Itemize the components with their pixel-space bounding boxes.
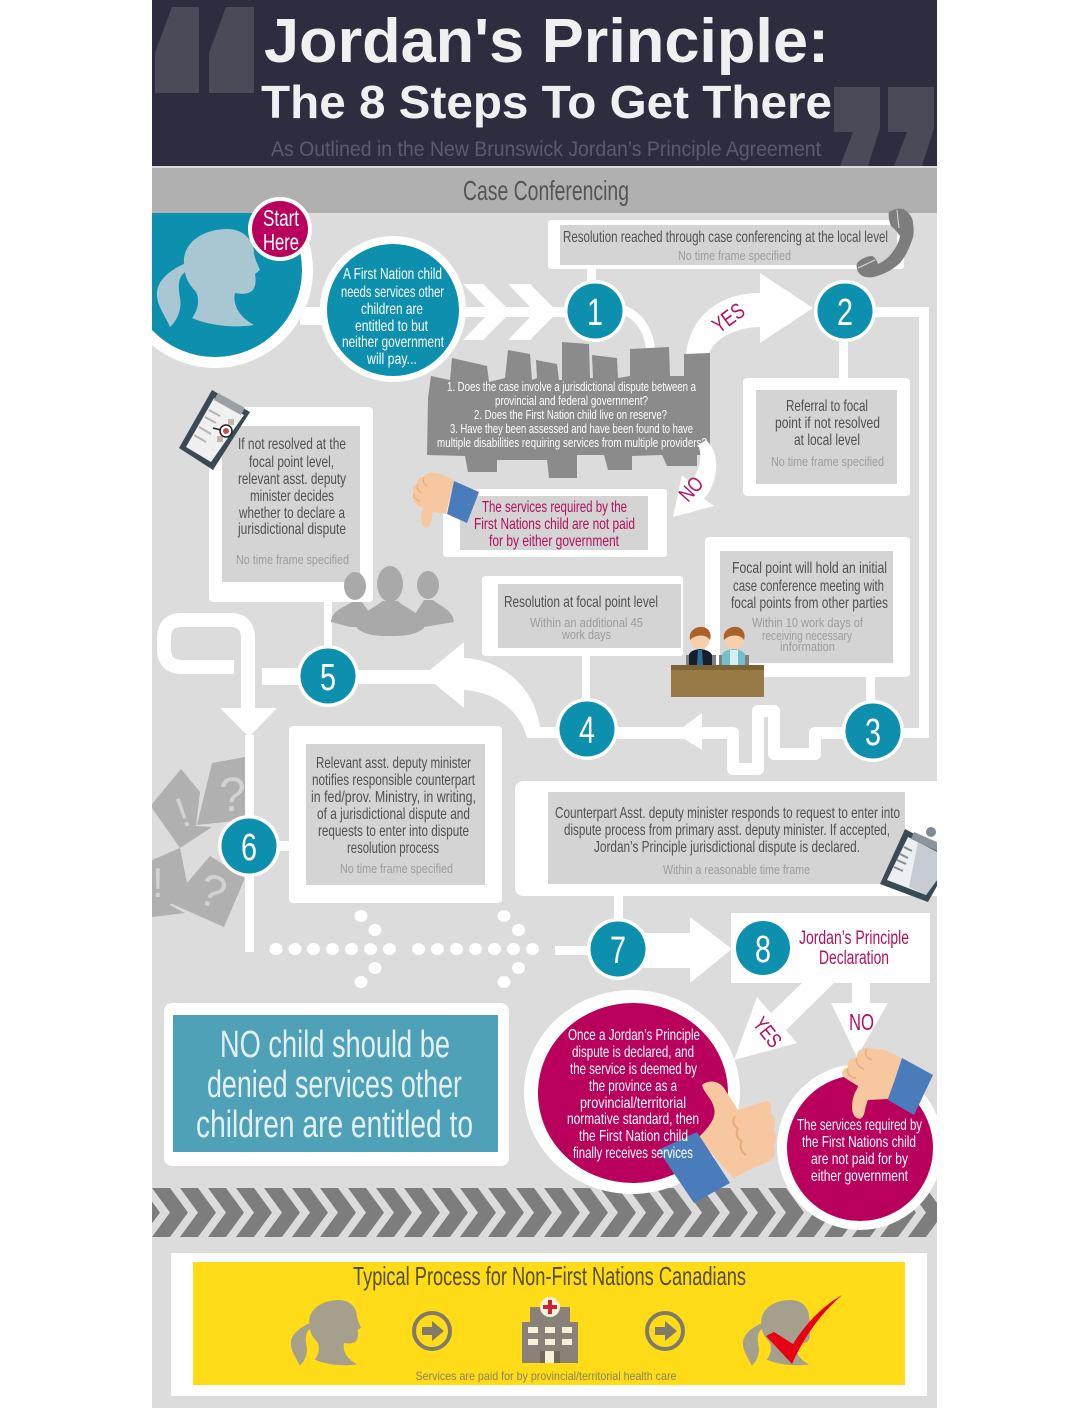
panel: resolution at focal point: work days bbox=[561, 628, 611, 642]
panel: step 8 declaration: Jordan’s Principle bbox=[799, 928, 909, 949]
circle: first nation child: children are bbox=[361, 301, 423, 318]
panel: gray question block bbox=[427, 342, 710, 478]
title: Jordan's Principle: bbox=[264, 7, 829, 76]
panel: gray question block: 1. Does the case involve a jurisdictional dispute between a bbox=[447, 380, 696, 394]
badge: start here: Here bbox=[263, 229, 299, 255]
icon: clipboard with chart bbox=[880, 827, 937, 902]
connector paths bbox=[164, 268, 924, 983]
circle: first nation child: entitled to but bbox=[355, 318, 428, 335]
icon: two officials at desk bbox=[671, 627, 764, 697]
panel: services not paid: for by either government bbox=[489, 533, 619, 550]
panel: services not paid: The services required by the bbox=[482, 499, 627, 516]
callout: no child should be denied: denied services other bbox=[207, 1064, 462, 1106]
panel: relevant asst. deputy minister notifies: resolution process bbox=[347, 840, 439, 857]
circle: services not paid bbox=[777, 1064, 943, 1230]
badge: start here bbox=[248, 197, 312, 261]
icon: question and exclamation tiles: ! bbox=[169, 788, 196, 836]
arrow: yes from step 8: YES bbox=[748, 1013, 786, 1052]
panel: services not paid bbox=[443, 489, 667, 557]
circle: first nation child: needs services other bbox=[341, 284, 444, 301]
circle: service received: provincial/territorial bbox=[580, 1095, 686, 1112]
panel: focal point meeting bbox=[705, 537, 910, 677]
panel: local resolution: No time frame specified bbox=[678, 249, 791, 263]
panel: focal point meeting: Within 10 work days of bbox=[752, 616, 863, 630]
step 1 bbox=[564, 280, 626, 342]
icon: girl silhouette bbox=[157, 229, 260, 327]
panel: counterpart response: Within a reasonable time frame bbox=[663, 863, 810, 877]
panel: relevant asst. deputy minister notifies: No time frame specified bbox=[340, 862, 453, 876]
callout: no child should be denied: children are entitled to bbox=[196, 1104, 473, 1146]
circle: first nation child: A First Nation child bbox=[343, 266, 442, 283]
step 5 bbox=[297, 645, 359, 707]
panel: relevant asst. deputy minister notifies: requests to enter into dispute bbox=[318, 823, 469, 840]
arrow: yes from step 8 bbox=[734, 983, 834, 1060]
step 2 bbox=[814, 280, 876, 342]
arrow: yes to step 2: YES bbox=[707, 298, 749, 338]
circle: services not paid: The services required by bbox=[797, 1117, 922, 1134]
panel: typical process: Typical Process for Non-First Nations Canadians bbox=[353, 1261, 746, 1291]
circle: service received: the First Nation child bbox=[579, 1128, 688, 1145]
panel: focal point meeting: case conference meeting with bbox=[733, 578, 884, 595]
panel: local resolution: Resolution reached through case conferencing at the local level bbox=[563, 229, 888, 246]
panel: step 8 declaration: Declaration bbox=[819, 948, 889, 969]
step 4: 4 bbox=[579, 710, 595, 752]
step 6 bbox=[218, 815, 280, 877]
step 2: 2 bbox=[837, 292, 853, 334]
agreement note: As Outlined in the New Brunswick Jordan’s Principle Agreement bbox=[271, 138, 821, 161]
panel: not resolved at focal point level: If not resolved at the bbox=[238, 436, 346, 453]
chevron band bbox=[124, 1188, 944, 1237]
caption: paid by health care: Services are paid for by provincial/territorial health care bbox=[416, 1369, 677, 1383]
panel: referral to focal point: No time frame specified bbox=[771, 455, 884, 469]
icon: question and exclamation tiles: ? bbox=[219, 769, 246, 822]
panel: focal point meeting: Focal point will hold an initial bbox=[732, 560, 887, 577]
panel: referral to focal point bbox=[743, 378, 910, 496]
callout: no child should be denied: NO child should be bbox=[220, 1024, 450, 1066]
panel: not resolved at focal point level: jurisdictional dispute bbox=[237, 521, 346, 538]
panel: relevant asst. deputy minister notifies: of a jurisdictional dispute and bbox=[317, 806, 470, 823]
icon: thumbs down bbox=[413, 473, 479, 528]
panel: step 8 declaration bbox=[731, 913, 930, 983]
icon: closing quotation marks bbox=[834, 87, 934, 166]
panel: services not paid: First Nations child are not paid bbox=[474, 516, 635, 533]
panel: referral to focal point: point if not resolved bbox=[775, 415, 880, 432]
panel: counterpart response: dispute process from primary asst. deputy minister. If accepted, bbox=[564, 822, 890, 839]
arrow: no to not paid box bbox=[673, 440, 716, 517]
circle: first nation child bbox=[320, 236, 466, 382]
circle: service received: the province as a bbox=[589, 1078, 677, 1095]
section band: case conferencing: Case Conferencing bbox=[463, 175, 629, 206]
step 1: 1 bbox=[587, 292, 603, 334]
panel: not resolved at focal point level: No time frame specified bbox=[236, 553, 349, 567]
panel: relevant asst. deputy minister notifies bbox=[289, 726, 502, 903]
subtitle line: The 8 Steps To Get There bbox=[261, 76, 832, 128]
icon: girl with check bbox=[743, 1295, 842, 1366]
panel: gray question block: 2. Does the First Nation child live on reserve? bbox=[474, 408, 667, 422]
panel: gray question block: 3. Have they been assessed and have been found to have bbox=[450, 422, 693, 436]
icon: hospital bbox=[522, 1297, 578, 1363]
panel: not resolved at focal point level: minister decides bbox=[250, 488, 334, 505]
icon: arrow in circle bbox=[414, 1313, 450, 1349]
panel: relevant asst. deputy minister notifies: Relevant asst. deputy minister bbox=[316, 755, 471, 772]
step 6: 6 bbox=[241, 827, 257, 869]
icon: question and exclamation tiles: ! bbox=[152, 859, 164, 906]
panel: not resolved at focal point level: relevant asst. deputy bbox=[238, 471, 346, 488]
circle: first nation child: neither government bbox=[342, 334, 444, 351]
panel: focal point meeting: focal points from other parties bbox=[731, 595, 888, 612]
step 3 bbox=[842, 700, 904, 762]
icon: thumbs down right bbox=[842, 1048, 933, 1119]
arrow: no from step 8 bbox=[831, 983, 888, 1057]
panel: typical process bbox=[171, 1253, 927, 1396]
panel: resolution at focal point bbox=[482, 576, 683, 656]
panel: focal point meeting: receiving necessary bbox=[762, 629, 853, 643]
panel: resolution at focal point: Resolution at focal point level bbox=[504, 594, 658, 611]
icon: question and exclamation tiles bbox=[152, 757, 246, 927]
section band: case conferencing bbox=[152, 168, 937, 213]
dotted arrows bbox=[270, 910, 539, 988]
panel: not resolved at focal point level: whether to declare a bbox=[238, 505, 345, 522]
circle: service received: normative standard, then bbox=[567, 1111, 699, 1128]
panel: not resolved at focal point level: focal point level, bbox=[249, 454, 334, 471]
panel: gray question block: provincial and federal government? bbox=[495, 394, 648, 408]
step 3: 3 bbox=[865, 712, 881, 754]
panel: resolution at focal point: Within an additional 45 bbox=[530, 616, 643, 630]
step 5: 5 bbox=[320, 657, 336, 699]
icon: question and exclamation tiles: ? bbox=[192, 862, 234, 920]
header banner bbox=[152, 0, 937, 166]
panel: counterpart response: Counterpart Asst. deputy minister responds to request to enter into bbox=[555, 805, 900, 822]
callout: no child should be denied bbox=[164, 1003, 509, 1166]
circle: service received: dispute is declared, and bbox=[572, 1044, 694, 1061]
icon: telephone handset bbox=[857, 209, 914, 277]
circle: services not paid: are not paid for by bbox=[811, 1151, 908, 1168]
panel: referral to focal point: at local level bbox=[794, 432, 860, 449]
badge: start here: Start bbox=[263, 205, 299, 231]
circle: services not paid: either government bbox=[811, 1168, 908, 1185]
panel: not resolved at focal point level bbox=[209, 407, 373, 602]
circle: first nation child: will pay... bbox=[366, 351, 417, 368]
step 8 bbox=[736, 921, 790, 975]
arrow: no to not paid box: NO bbox=[675, 472, 708, 506]
icon: clipboard with magnifier bbox=[179, 390, 250, 470]
panel: focal point meeting: information bbox=[780, 640, 835, 654]
circle: service received bbox=[524, 990, 776, 1203]
icon: girl silhouette grey bbox=[291, 1300, 361, 1366]
panel: gray question block: multiple disabilities requiring services from multiple providers? bbox=[437, 436, 707, 450]
panel: counterpart response: Jordan’s Principle jurisdictional dispute is declared. bbox=[594, 839, 860, 856]
panel: local resolution bbox=[548, 220, 904, 269]
icon: group of people bbox=[331, 566, 454, 636]
panel: referral to focal point: Referral to focal bbox=[786, 398, 868, 415]
icon: thumbs up bbox=[658, 1082, 776, 1203]
panel: counterpart response bbox=[515, 781, 955, 896]
arrow: yes to step 2 bbox=[686, 273, 813, 357]
circle: service received: the service is deemed by bbox=[570, 1061, 697, 1078]
circle: services not paid: the First Nations child bbox=[802, 1134, 916, 1151]
arrow: no from step 8: NO bbox=[849, 1009, 874, 1035]
circle: service received: Once a Jordan’s Principle bbox=[568, 1027, 700, 1044]
step 7: 7 bbox=[610, 930, 626, 972]
step 7 bbox=[587, 918, 649, 980]
icon: arrow in circle second bbox=[647, 1313, 683, 1349]
circle: service received: finally receives services bbox=[573, 1145, 693, 1162]
step 4 bbox=[556, 698, 618, 760]
start circle with girl silhouette bbox=[152, 213, 313, 368]
panel: relevant asst. deputy minister notifies: notifies responsible counterpart bbox=[312, 772, 475, 789]
icon: opening quotation marks bbox=[155, 7, 254, 93]
step 8: 8 bbox=[755, 929, 771, 971]
panel: relevant asst. deputy minister notifies: in fed/prov. Ministry, in writing, bbox=[311, 789, 476, 806]
